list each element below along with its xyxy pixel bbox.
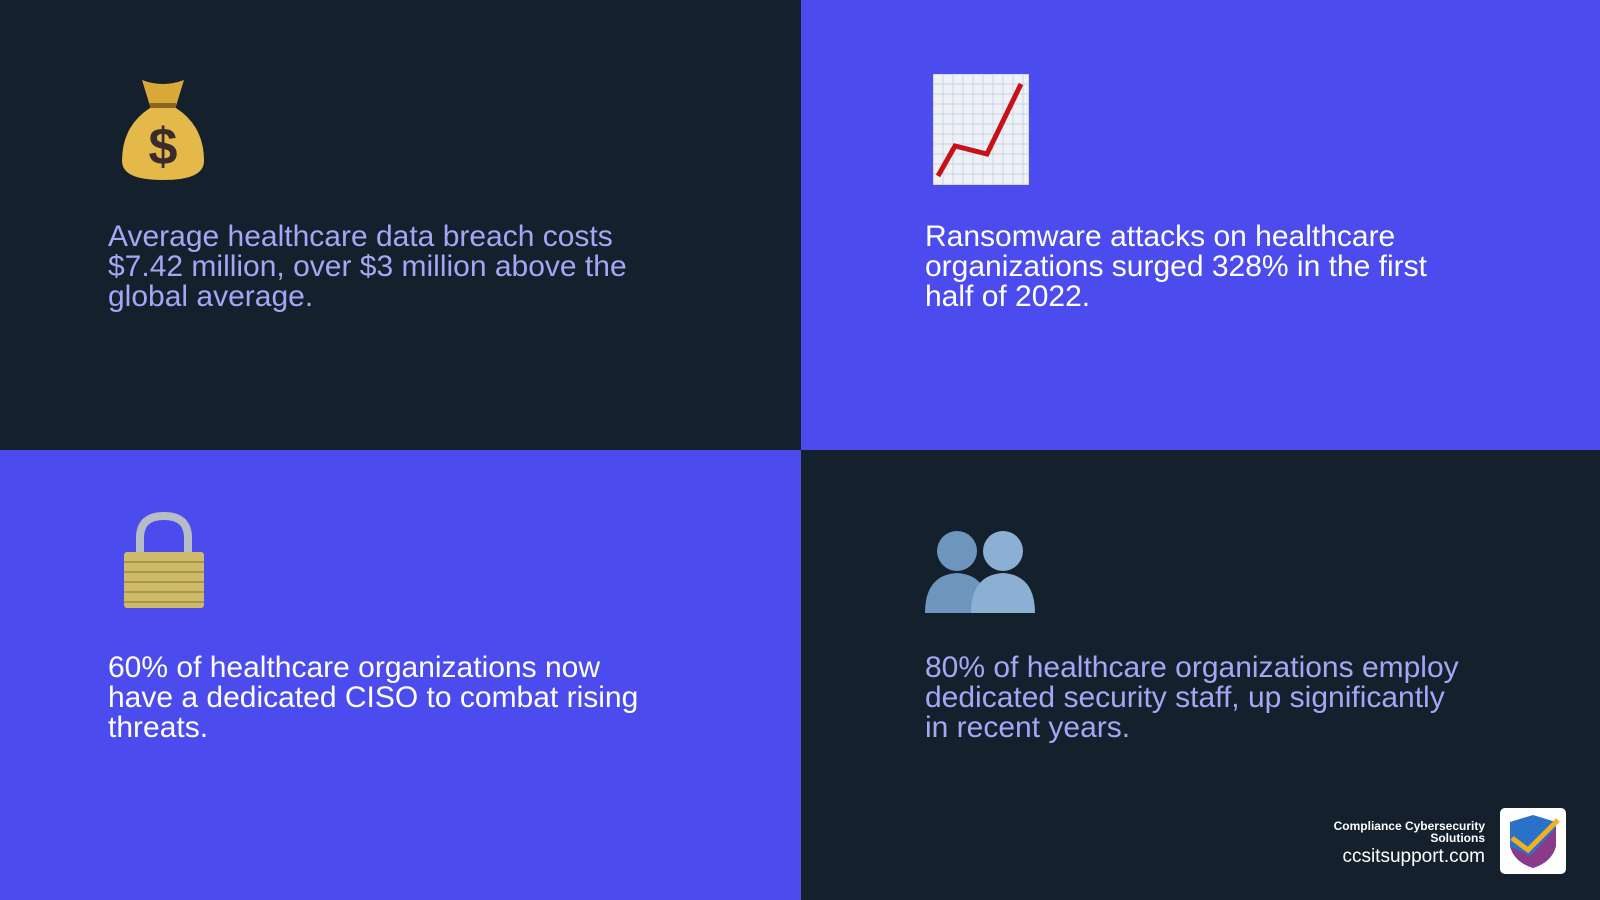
- text: ransomware: Ransomware attacks on healthcare organizations surged 328% in the first half of 2022.: [925, 220, 1427, 313]
- text: CISO: 60% of healthcare organizations now have a dedicated CISO to combat rising threats.: [108, 651, 638, 744]
- text: security staff: 80% of healthcare organizations employ dedicated security staff, up significantly in recent years.: [925, 651, 1459, 744]
- logo text: Solutions: [1430, 831, 1485, 845]
- panel: ransomware: [801, 0, 1600, 450]
- text: breach cost: Average healthcare data breach costs $7.42 million, over $3 million above the global average.: [108, 220, 627, 313]
- logo block: [1334, 808, 1566, 874]
- panel: breach cost: [0, 0, 801, 450]
- logo text: ccsitsupport.com: [1342, 846, 1485, 867]
- icon: chart: [933, 74, 1029, 185]
- icon: lock: [124, 512, 204, 608]
- panel: CISO: [0, 450, 801, 900]
- logo icon: [1500, 808, 1566, 874]
- icon: busts: [925, 531, 1035, 613]
- icon: money bag: [122, 80, 204, 180]
- panel: security staff: [801, 450, 1600, 900]
- logo text: Compliance Cybersecurity: [1334, 819, 1485, 833]
- logo text: [1334, 819, 1485, 867]
- icon: money bag: $: [149, 118, 178, 176]
